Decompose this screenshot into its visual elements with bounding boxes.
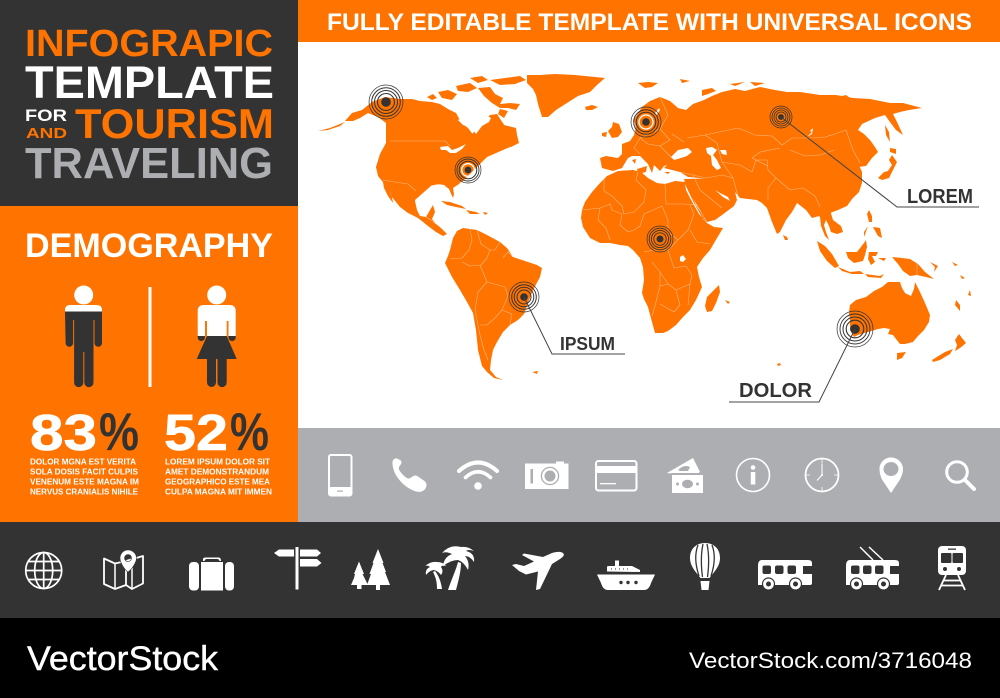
panel: title: FOR [25,106,67,125]
icon: banknotes [667,458,704,493]
callout: LOREM: LOREM [907,185,973,208]
text block: 83% description: VENENUM ESTE MAGNA IM [30,478,139,486]
Central and East Asia [664,148,862,234]
icon: palm trees [425,546,474,590]
text block: 83% description [30,458,139,496]
icon: airplane [512,552,564,590]
country borders [383,97,917,360]
panel: title: TEMPLATE [25,57,274,108]
panel: title: INFOGRAPIC [25,23,273,65]
location marker: Russia [770,106,792,128]
location marker: Europe [631,107,661,137]
callout: IPSUM [524,297,625,354]
text block: 83% description: NERVUS CRANIALIS NIHILE [30,488,139,496]
statistic: 83%: % [99,403,139,462]
Arabia [684,178,737,222]
Svalbard & Novaya Zemlya [638,79,850,98]
New Guinea [878,257,938,279]
Sri Lanka [783,235,788,240]
New Zealand [932,300,966,362]
icon: man [65,286,102,387]
icon: ship [597,560,655,590]
image id url: VectorStock.com/3716048 [689,648,972,673]
panel: title: AND [26,125,67,142]
panel: title: TOURISM [75,100,274,147]
icon: woman [197,286,237,387]
divider [148,287,152,387]
UK & Ireland [602,122,622,138]
icon: folded map [104,550,143,589]
text block: 83% description: DOLOR MGNA EST VERITA [30,458,136,466]
panel: title: TRAVELING [25,139,273,188]
panel: title [0,0,298,206]
callout: LOREM [781,117,979,208]
icon: suitcase [189,558,234,590]
continent shapes [318,74,971,380]
North America interior fill [376,100,516,206]
callout: IPSUM: IPSUM [560,334,615,354]
location marker: Africa [647,226,673,252]
icon: credit card [596,461,636,490]
Islands Caribbean [441,201,538,374]
Philippines [864,210,882,238]
statistic: 83% [30,403,139,462]
panel: travel icons [0,522,1000,618]
footer: VectorStock bar [0,618,1000,698]
text block: 52% description: GEOGRAPHICO ESTE MEA [165,478,270,486]
icon: clock [806,458,838,492]
icon: hot air balloon [690,543,720,590]
statistic: 83%: 83 [30,404,97,461]
Europe [600,97,692,173]
Mediterranean islands [632,159,670,174]
Small pacific islands [725,262,971,366]
icon: smartphone [329,455,352,496]
heading: demography: DEMOGRAPHY [25,227,273,265]
icon: magnifier [947,462,974,489]
icon: bus [758,560,812,590]
icon: camera [525,462,568,489]
callout: DOLOR [729,329,855,402]
location marker: Australia [837,311,873,347]
statistic: 52%: % [230,403,269,462]
Borneo [846,240,867,263]
statistic: 52% [164,403,269,462]
North America [345,97,519,236]
Russia [678,87,922,172]
panel: demography [0,206,298,522]
callout: DOLOR: DOLOR [739,379,812,402]
South America [445,228,542,380]
Sumatra [817,241,839,268]
statistic: 52%: 52 [164,404,228,461]
header banner [298,0,1000,42]
Sulawesi [868,252,878,265]
text block: 52% description: CULPA MAGNA MIT IMMEN [165,488,272,496]
icon: wifi [459,462,497,490]
icon: trolleybus [846,547,899,590]
lakes and seas [440,108,813,262]
South East Asia [812,210,843,240]
location marker: USA [455,157,481,183]
Korea [850,163,860,176]
Baja California [383,182,393,203]
Canadian arctic islands [427,76,526,120]
Australia [849,282,930,344]
world map [318,74,971,380]
icon: telephone [392,458,427,492]
icon: train [938,546,966,590]
icon: signpost [274,547,322,590]
text block: 52% description: AMET DEMONSTRANDUM [165,468,269,476]
header banner: FULLY EDITABLE TEMPLATE WITH UNIVERSAL ICONS [327,9,972,36]
Greenland [527,74,605,117]
icon: map pin [880,458,903,493]
icon: pine trees [351,549,390,590]
text block: 52% description [165,458,272,496]
Madagascar [705,285,720,312]
Japan & Sakhalin [878,125,897,180]
icon: information [736,458,770,492]
Aleutians [318,122,345,131]
location marker: Brazil [509,282,539,312]
icon: globe [26,552,62,588]
panel: device icons [298,428,1000,522]
location marker: Alaska [369,85,403,119]
Tasmania [897,352,906,360]
text block: 83% description: SOLA DOSIS FACIT CULPIS [30,468,139,476]
wordmark: VectorStock [27,640,219,678]
Iceland [585,105,598,110]
Java & Timor [838,267,884,278]
text block: 52% description: LOREM IPSUM DOLOR SIT [165,458,270,466]
Africa [581,170,723,333]
